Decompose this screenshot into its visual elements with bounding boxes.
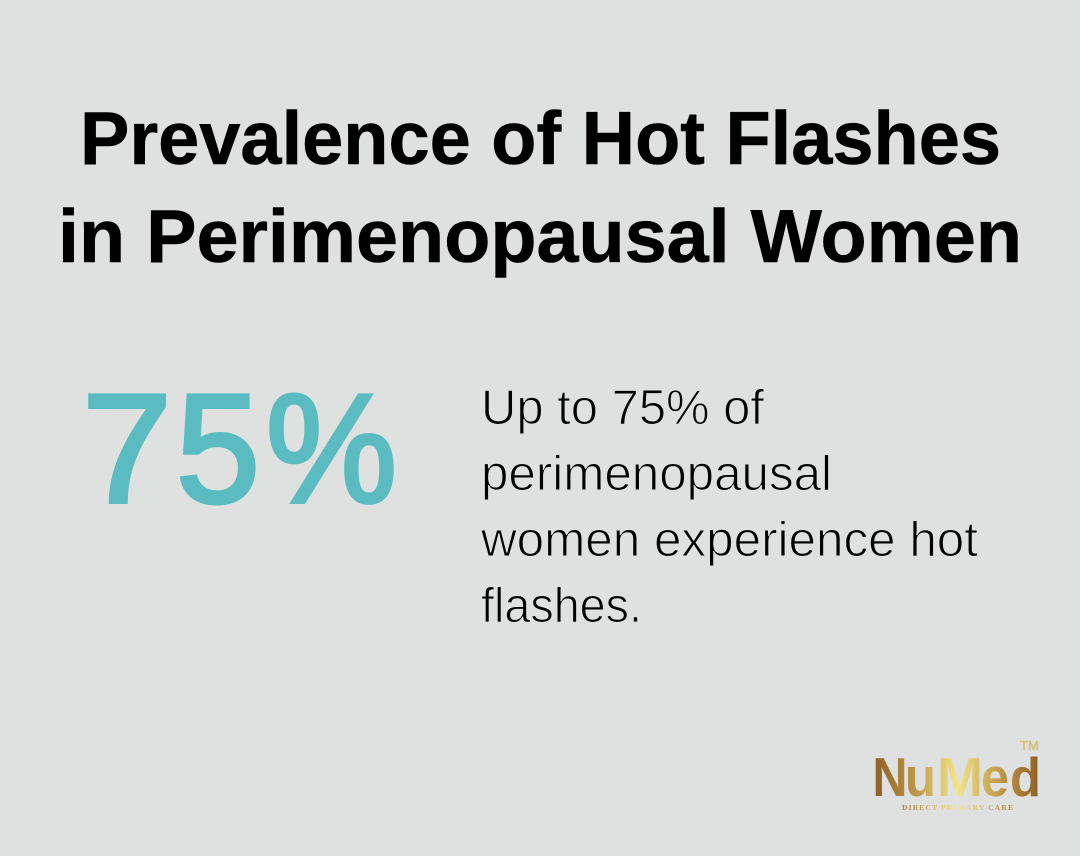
- title: [58, 96, 1022, 278]
- description text: flashes.: [481, 579, 642, 633]
- big statistic: 75%: [82, 362, 397, 535]
- logo: NuMed: DIRECT PRIMARY CARE: [902, 803, 1013, 812]
- logo: NuMed: u: [905, 746, 936, 808]
- description text: [480, 381, 978, 633]
- logo: NuMed: d: [1010, 746, 1041, 808]
- description text: women experience hot: [480, 513, 978, 567]
- big statistic: 75%: %: [266, 362, 397, 535]
- description text: Up to 75% of: [481, 381, 764, 435]
- big statistic: 75%: 5: [176, 362, 260, 535]
- description text: perimenopausal: [481, 447, 832, 501]
- logo: NuMed: M: [937, 746, 983, 808]
- title: in Perimenopausal Women: [58, 194, 1022, 278]
- title: Prevalence of Hot Flashes: [80, 96, 1001, 180]
- logo: NuMed: e: [981, 746, 1009, 808]
- big statistic: 75%: 7: [82, 362, 172, 535]
- logo: NuMed: TM: [1020, 739, 1039, 753]
- logo: NuMed: N: [872, 746, 908, 808]
- logo: NuMed: [872, 739, 1041, 812]
